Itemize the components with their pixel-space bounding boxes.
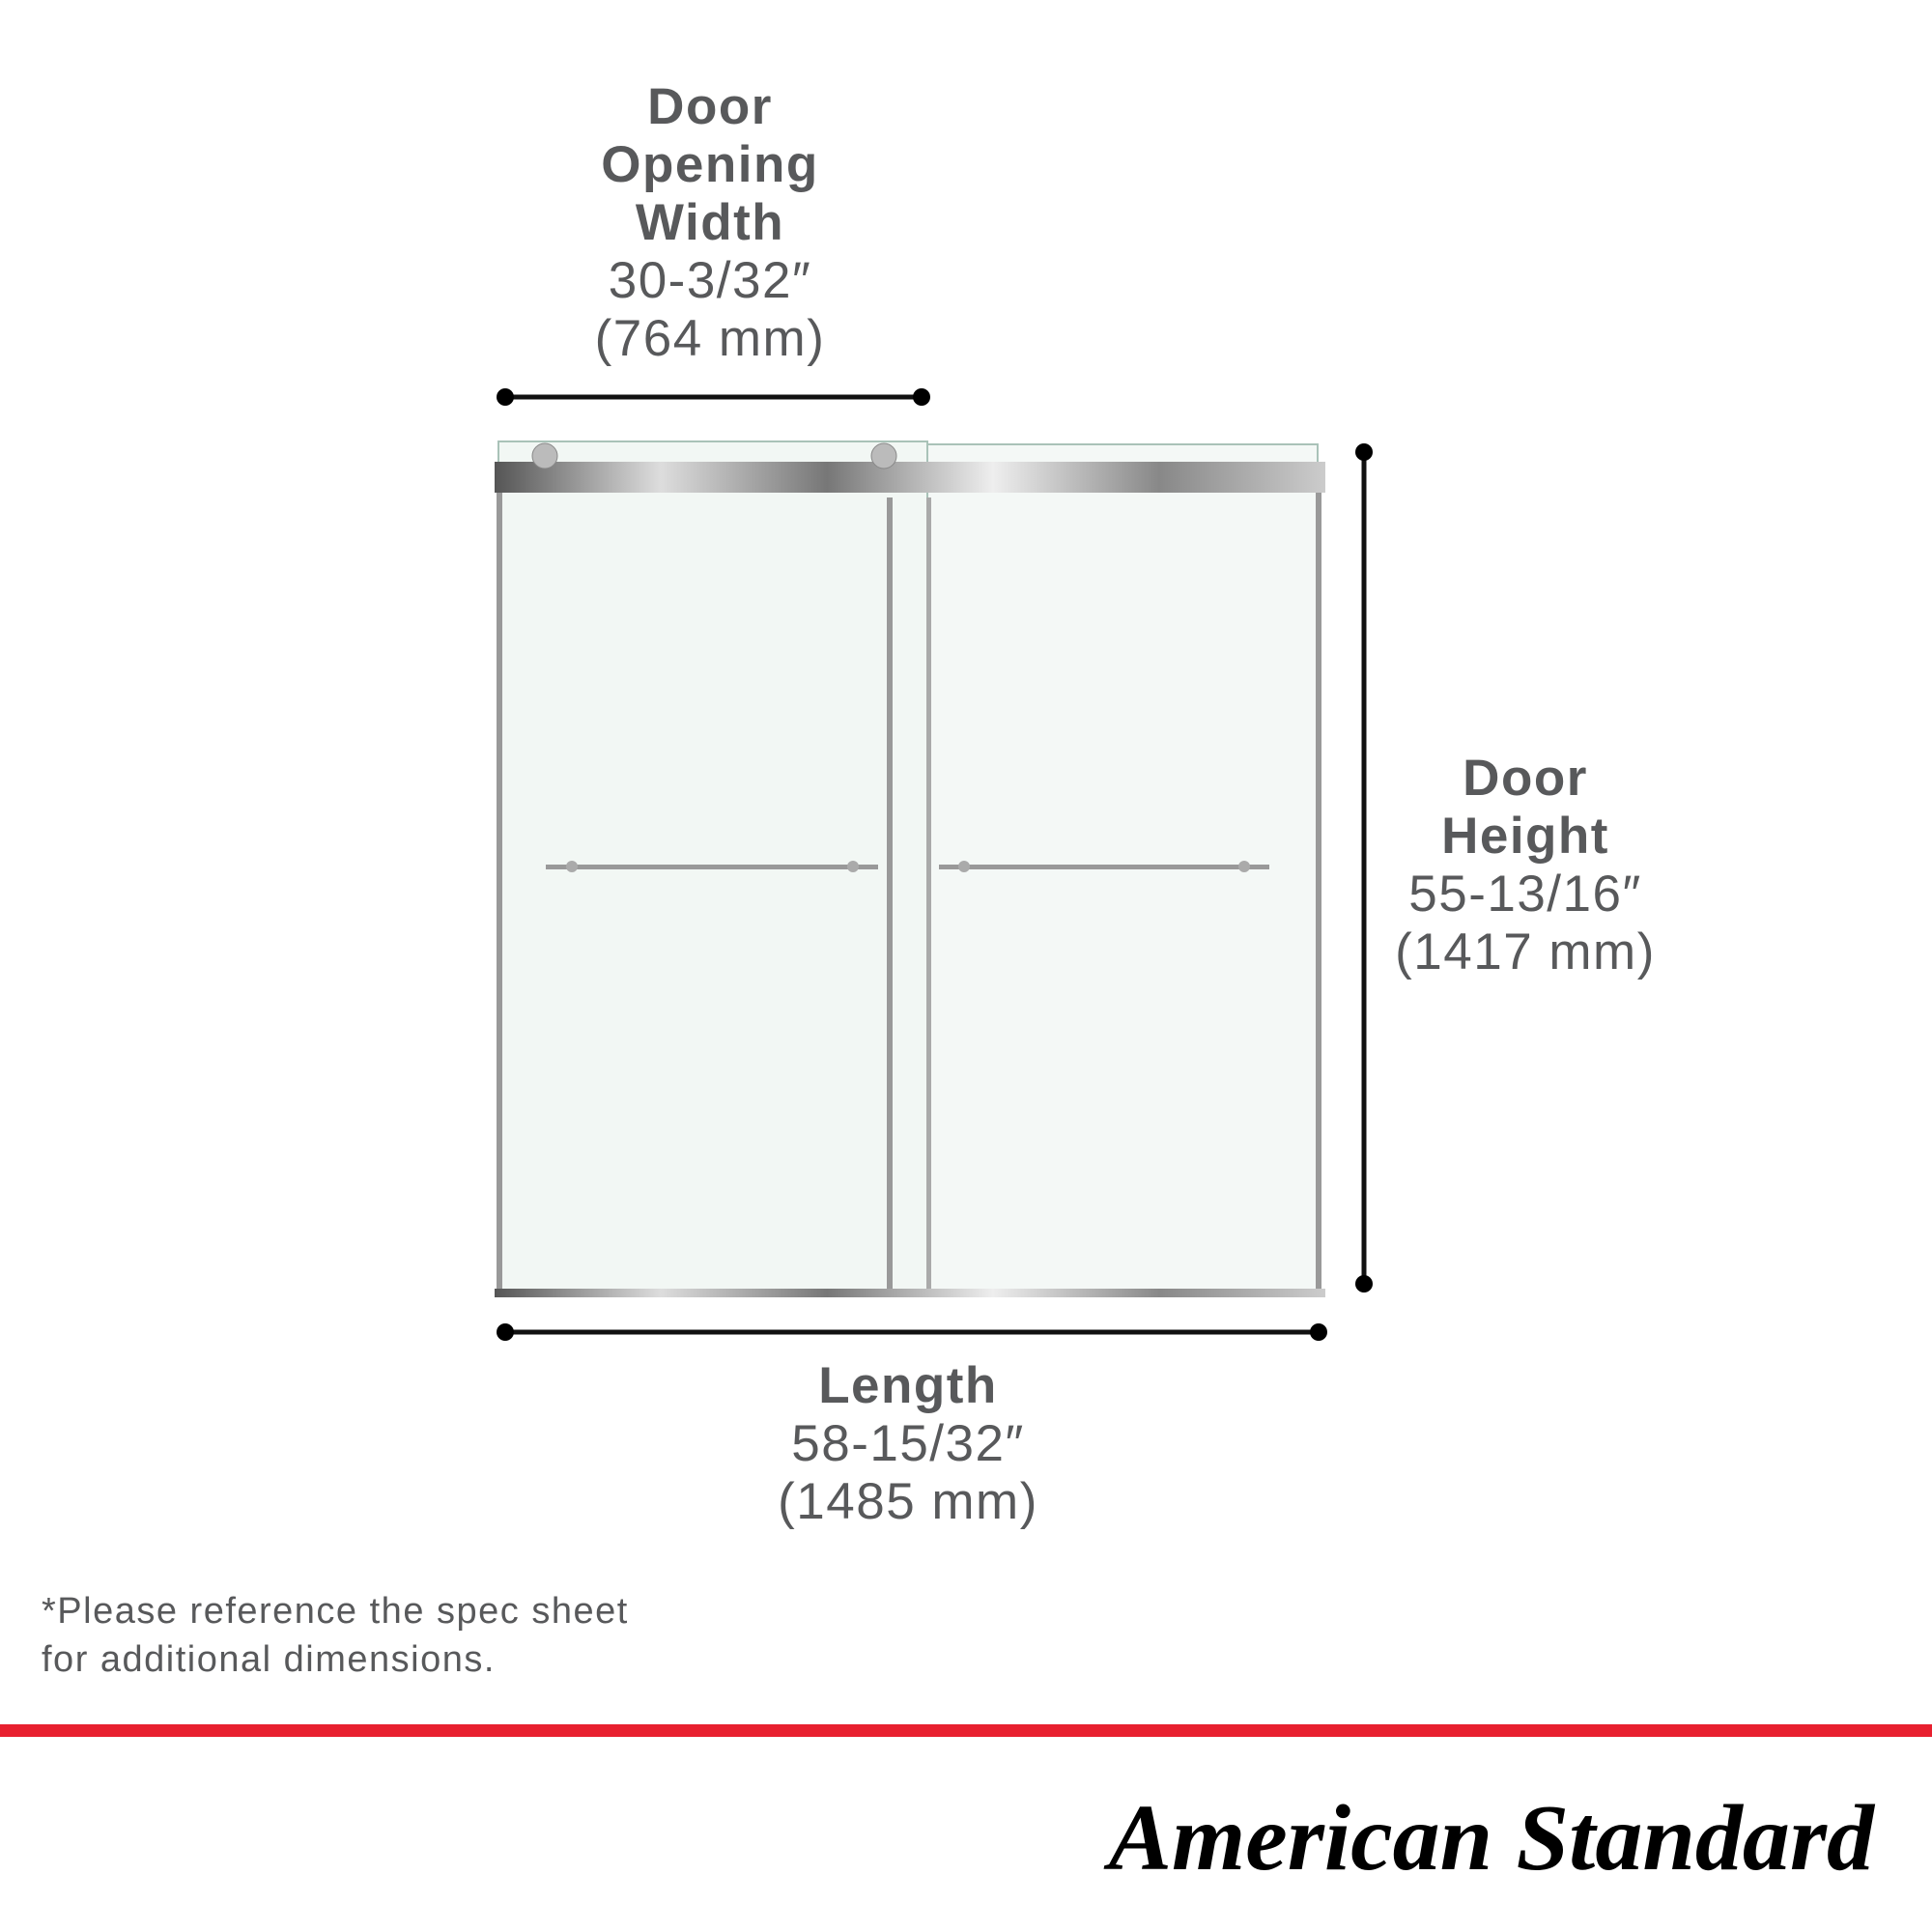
label: door height: Height: [1441, 808, 1609, 865]
label: door height: [1395, 750, 1656, 980]
footnote: for additional dimensions.: [42, 1639, 496, 1680]
dimension: length: [497, 1323, 1327, 1341]
red divider: [0, 1724, 1932, 1737]
door assembly: [495, 441, 1325, 1297]
logo: American Standard: American Standard: [1109, 1786, 1874, 1890]
label: door opening width: Width: [636, 194, 784, 251]
label: length: 58-15/32″: [791, 1415, 1025, 1472]
label: door height: 55-13/16″: [1408, 866, 1642, 923]
label: door height: Door: [1463, 750, 1588, 807]
label: door opening width: Door: [647, 78, 773, 135]
footnote: *Please reference the spec sheet: [42, 1591, 629, 1632]
dimension: height: [1355, 443, 1373, 1293]
label: door height: (1417 mm): [1395, 923, 1656, 980]
label: door opening width: [595, 78, 825, 367]
dimension: opening width: [497, 388, 930, 406]
label: length: Length: [818, 1357, 998, 1414]
label: length: (1485 mm): [778, 1473, 1038, 1530]
footnote: [42, 1591, 629, 1680]
label: door opening width: 30-3/32″: [609, 252, 811, 309]
label: door opening width: (764 mm): [595, 310, 825, 367]
handle: right: [939, 861, 1269, 872]
label: length: [778, 1357, 1038, 1530]
label: door opening width: Opening: [601, 136, 819, 193]
handle: left: [546, 861, 878, 872]
